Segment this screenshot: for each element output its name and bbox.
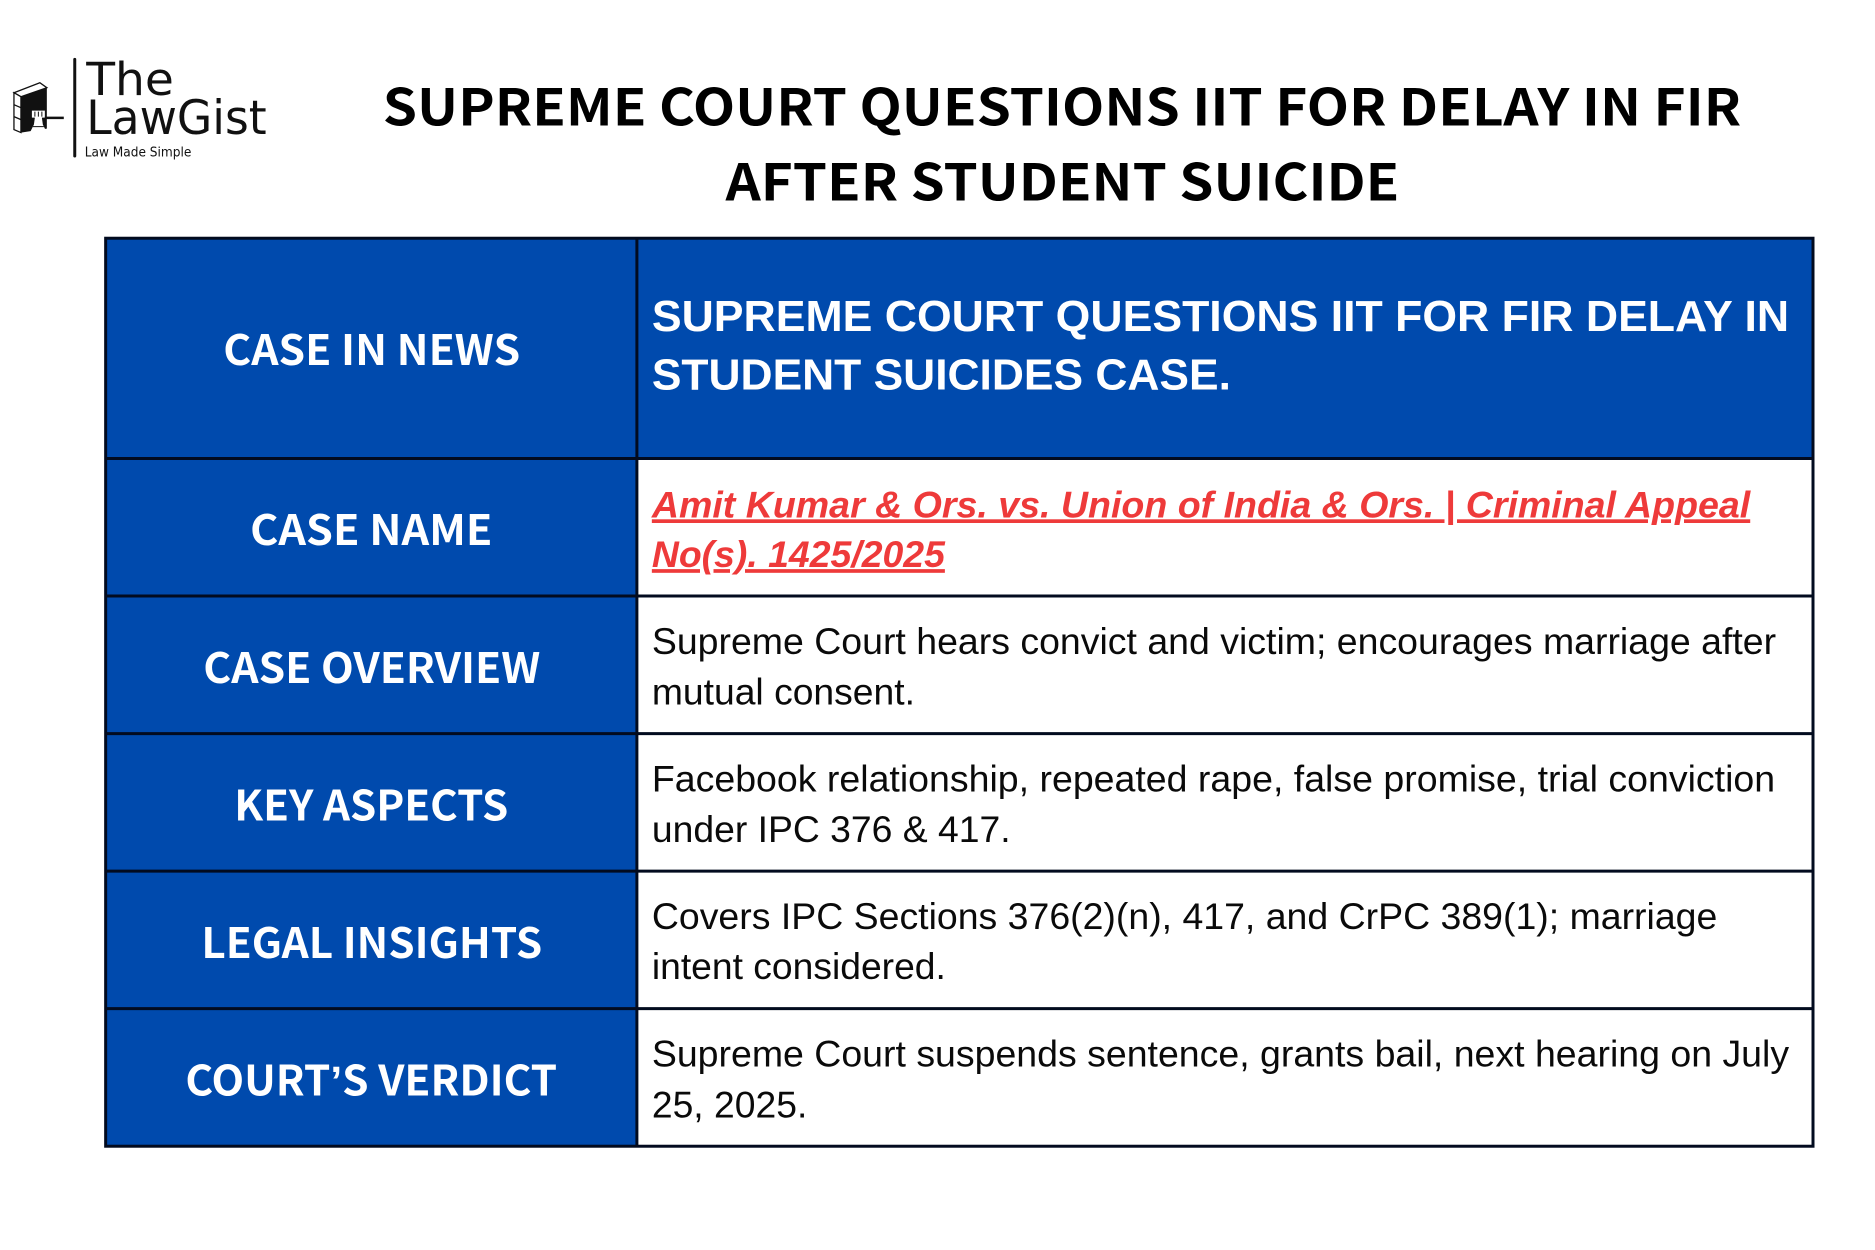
table xyxy=(106,238,1813,1146)
logo divider bar xyxy=(73,58,76,157)
row: case name: No(s). 1425/2025 xyxy=(652,534,945,575)
row: case in news: STUDENT SUICIDES CASE. xyxy=(652,351,1231,400)
row: key aspects: Facebook relationship, repeated rape, false promise, trial conviction xyxy=(652,758,1775,799)
row: case in news: SUPREME COURT QUESTIONS IIT FOR FIR DELAY IN xyxy=(652,292,1789,341)
row: case overview xyxy=(203,621,1776,713)
row: case name: Amit Kumar & Ors. vs. Union of India & Ors. | Criminal Appeal xyxy=(651,484,1751,525)
logo wordmark: The: The xyxy=(85,52,174,106)
row: case in news xyxy=(223,292,1789,400)
title: AFTER STUDENT SUICIDE xyxy=(725,141,1399,215)
row: court's verdict xyxy=(185,1033,1790,1125)
icon: law book and gavel xyxy=(14,83,64,133)
table backgrounds xyxy=(106,238,1813,1146)
row: case name: CASE NAME xyxy=(250,497,492,558)
logo xyxy=(14,52,267,160)
row: key aspects: under IPC 376 & 417. xyxy=(652,809,1011,850)
logo wordmark: LawGist: LawGist xyxy=(86,92,267,146)
title xyxy=(383,67,1741,215)
row: case overview: mutual consent. xyxy=(652,672,915,713)
row: case overview: Supreme Court hears convict and victim; encourages marriage after xyxy=(652,621,1776,662)
row: case name xyxy=(250,484,1751,575)
table grid lines xyxy=(106,238,1813,1146)
row: legal insights: LEGAL INSIGHTS xyxy=(201,910,542,971)
row: court's verdict: Supreme Court suspends sentence, grants bail, next hearing on July xyxy=(652,1033,1790,1074)
row: key aspects: KEY ASPECTS xyxy=(234,772,508,833)
row: legal insights xyxy=(201,896,1717,987)
title: SUPREME COURT QUESTIONS IIT FOR DELAY IN FIR xyxy=(383,67,1741,141)
row: case overview: CASE OVERVIEW xyxy=(203,635,540,696)
row: legal insights: intent considered. xyxy=(652,946,946,987)
row: key aspects xyxy=(234,758,1775,850)
logo tagline: Law Made Simple xyxy=(85,145,191,160)
row: case in news: CASE IN NEWS xyxy=(223,317,520,378)
row: legal insights: Covers IPC Sections 376(2)(n), 417, and CrPC 389(1); marriage xyxy=(652,896,1717,937)
row: court's verdict: 25, 2025. xyxy=(652,1084,807,1125)
row: court's verdict: COURT’S VERDICT xyxy=(185,1047,557,1108)
